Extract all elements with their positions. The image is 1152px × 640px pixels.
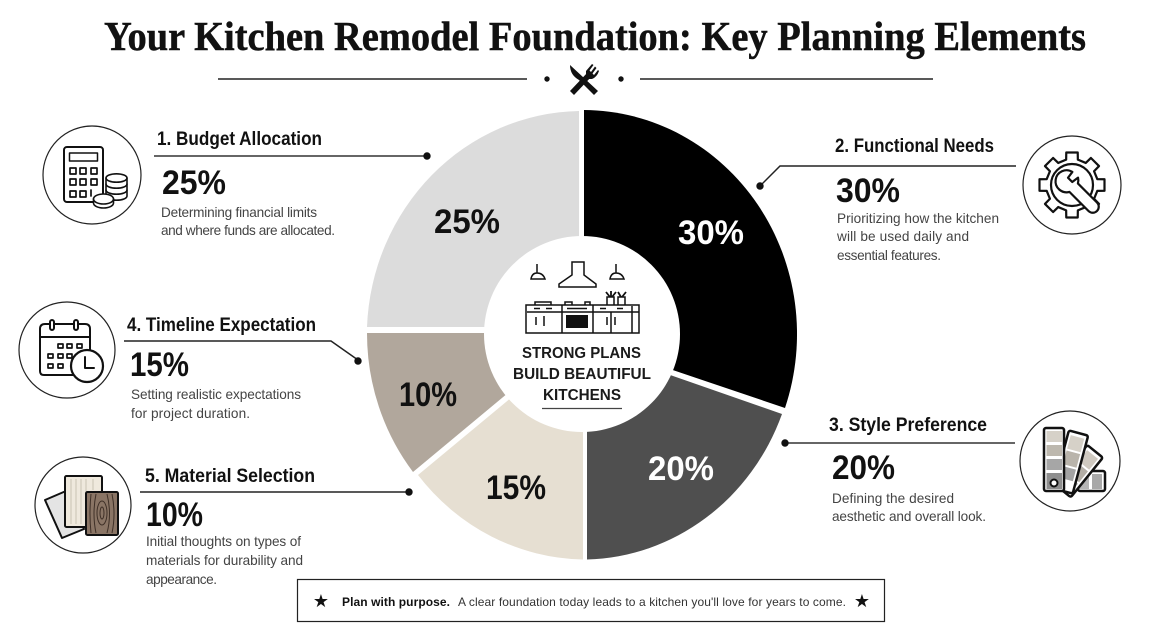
slice: material selection 15% [418,338,583,560]
icon: color swatch fan [1020,411,1120,511]
callout text: Plan with purpose. [342,595,450,609]
panel: budget allocation [43,126,431,238]
icon: right star: ★ [854,591,870,612]
percentage: 25% [162,164,226,202]
label: 20%: 20% [648,450,714,488]
icon: material samples [35,457,131,553]
leader line [124,341,362,365]
center caption [513,345,651,408]
slice: functional needs 30% [584,110,797,408]
leader line [140,488,413,496]
panel: style preference [781,411,1120,524]
icon: gear and wrench [1023,136,1121,234]
slice: budget allocation 25% [367,111,579,327]
description: will be used daily and [836,229,969,244]
description: and where funds are allocated. [161,223,335,238]
description: Prioritizing how the kitchen [837,211,999,226]
icon: fork and knife [570,64,599,95]
label: 30%: 30% [678,214,744,252]
heading: 2. Functional Needs [835,136,994,157]
heading: 3. Style Preference [829,415,987,436]
description: Setting realistic expectations [131,387,301,402]
panel: functional needs [756,136,1121,263]
percentage: 30% [836,172,900,210]
icon: kitchen illustration [526,262,639,333]
icon: left star: ★ [313,591,329,612]
center caption: STRONG PLANS [522,345,641,362]
description: essential features. [837,248,941,263]
center circle [484,236,680,432]
description: Initial thoughts on types of [146,534,301,549]
percentage: 10% [146,496,203,534]
leader line [756,166,1016,190]
leader line [781,439,1015,447]
callout text: A clear foundation today leads to a kitchen you'll love for years to come. [458,595,846,609]
heading: 5. Material Selection [145,466,315,487]
label: 15%: 15% [486,469,546,507]
heading: 4. Timeline Expectation [127,315,316,336]
percentage: 20% [832,449,895,487]
slice: style preference 20% [587,346,782,560]
center caption: BUILD BEAUTIFUL [513,366,651,383]
label: 10%: 10% [399,376,457,414]
center caption: KITCHENS [543,387,621,404]
donut chart [367,110,797,560]
label: 25%: 25% [434,203,500,241]
title divider with fork and knife [218,64,933,95]
title: Your Kitchen Remodel Foundation: Key Planning Elements [104,13,1086,59]
icon: calculator and coins [43,126,141,224]
panel: timeline expectation [19,302,362,421]
icon: calendar and clock [19,302,115,398]
callout: plan with purpose [298,580,884,622]
slice: timeline expectation 10% [367,333,580,472]
description: materials for durability and [146,553,303,568]
description: for project duration. [131,406,250,421]
panel: material selection [35,457,413,587]
percentage: 15% [130,346,189,384]
description: appearance. [146,572,217,587]
heading: 1. Budget Allocation [157,129,322,150]
description: aesthetic and overall look. [832,509,986,524]
leader line [154,152,431,160]
description: Determining financial limits [161,205,317,220]
description: Defining the desired [832,491,954,506]
